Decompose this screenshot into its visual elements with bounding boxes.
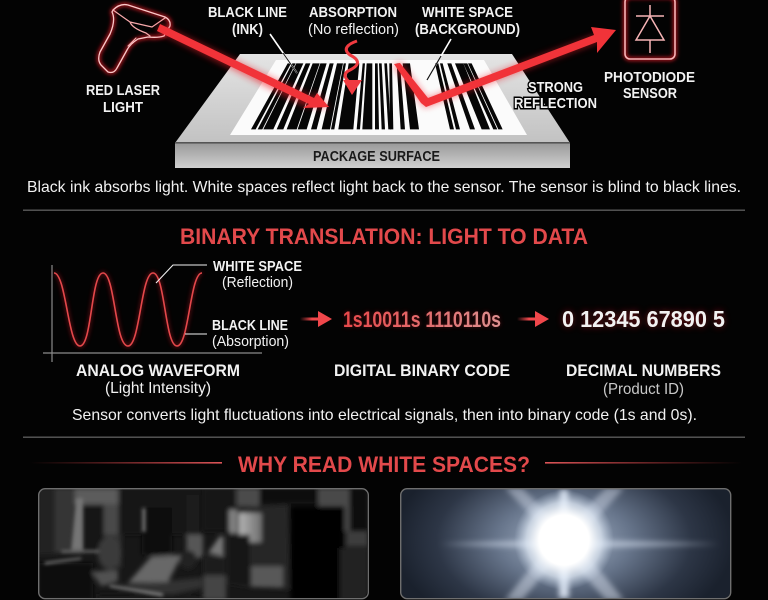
- label: white space background: (BACKGROUND): [415, 21, 520, 38]
- package surface slab: [175, 54, 570, 168]
- label: red laser light: [86, 82, 160, 116]
- label: white space background: [415, 4, 520, 38]
- label: photodiode sensor: [604, 69, 695, 102]
- arrow: binary to decimal: [517, 311, 549, 327]
- label: white space reflection: WHITE SPACE: [213, 258, 302, 275]
- label: black line absorption: [212, 317, 289, 350]
- label: strong reflection: [514, 79, 597, 112]
- label: analog waveform: ANALOG WAVEFORM: [76, 361, 240, 380]
- binary code: 1s10011s 1110110s: [343, 307, 501, 332]
- label: analog waveform: [76, 361, 240, 397]
- label: black line absorption: (Absorption): [212, 333, 289, 350]
- label: decimal numbers: (Product ID): [603, 381, 684, 398]
- section: why read white spaces: [30, 452, 742, 600]
- label: strong reflection: STRONG: [528, 79, 583, 96]
- barcode bars: [251, 63, 503, 129]
- icon: barcode scanner: [99, 5, 170, 72]
- icon: photodiode sensor: [625, 0, 675, 59]
- leader: white space peak: [156, 265, 207, 283]
- label: white space background: WHITE SPACE: [422, 4, 513, 21]
- label: black line ink: BLACK LINE: [208, 4, 287, 21]
- label: photodiode sensor: PHOTODIODE: [604, 69, 695, 86]
- label: white space reflection: [213, 258, 302, 291]
- label: absorption: ABSORPTION: [309, 4, 397, 21]
- section: binary translation: [43, 224, 725, 424]
- panel: bright reflected light photo: [400, 488, 732, 600]
- highlights: lit edges in the room: [45, 498, 163, 596]
- label: absorption: [308, 4, 399, 38]
- label: black line absorption: BLACK LINE: [212, 317, 288, 334]
- label: absorption: (No reflection): [308, 21, 399, 38]
- decimal numbers: 0 12345 67890 5: [562, 306, 725, 332]
- label: digital binary code: DIGITAL BINARY CODE: [334, 361, 510, 380]
- label: black line ink: (INK): [232, 21, 263, 38]
- black line leader: [270, 34, 297, 73]
- incoming laser beam: [157, 24, 329, 108]
- label: photodiode sensor: SENSOR: [623, 85, 677, 102]
- decimal numbers: 0 12345 67890 5: [562, 306, 725, 332]
- arrow: waveform to binary: [300, 311, 332, 327]
- binary code: 1s10011s 1110110s: [343, 307, 501, 332]
- label: decimal numbers: [566, 361, 721, 398]
- white label: [230, 60, 527, 135]
- package surface label: PACKAGE SURFACE: [313, 149, 440, 165]
- label: red laser light: RED LASER: [86, 82, 160, 99]
- heading: why read white spaces: WHY READ WHITE SPACES?: [238, 452, 530, 477]
- leader: black line trough: [185, 333, 207, 335]
- label: black line ink: [208, 4, 287, 38]
- label: decimal numbers: DECIMAL NUMBERS: [566, 361, 721, 380]
- caption: sensor conversion: Sensor converts light fluctuations into electrical signals, then into binary code (1s and 0s).: [72, 407, 697, 424]
- label: red laser light: LIGHT: [103, 99, 143, 116]
- caption: reflection explanation: Black ink absorbs light. White spaces reflect light back to the sensor. The sensor is blind to black lines.: [27, 179, 741, 196]
- label: analog waveform: (Light Intensity): [105, 380, 211, 397]
- section: barcode reflection diagram: [27, 0, 741, 196]
- reflected laser beam: [394, 27, 616, 107]
- label: strong reflection: REFLECTION: [514, 95, 597, 112]
- white space leader: [427, 39, 451, 80]
- heading: binary translation: BINARY TRANSLATION: LIGHT TO DATA: [180, 224, 588, 249]
- label: white space reflection: (Reflection): [222, 274, 293, 291]
- chart: analog waveform: [43, 265, 262, 362]
- panel: dark room photo: [38, 488, 369, 600]
- icon: absorption squiggle arrow: [343, 41, 362, 95]
